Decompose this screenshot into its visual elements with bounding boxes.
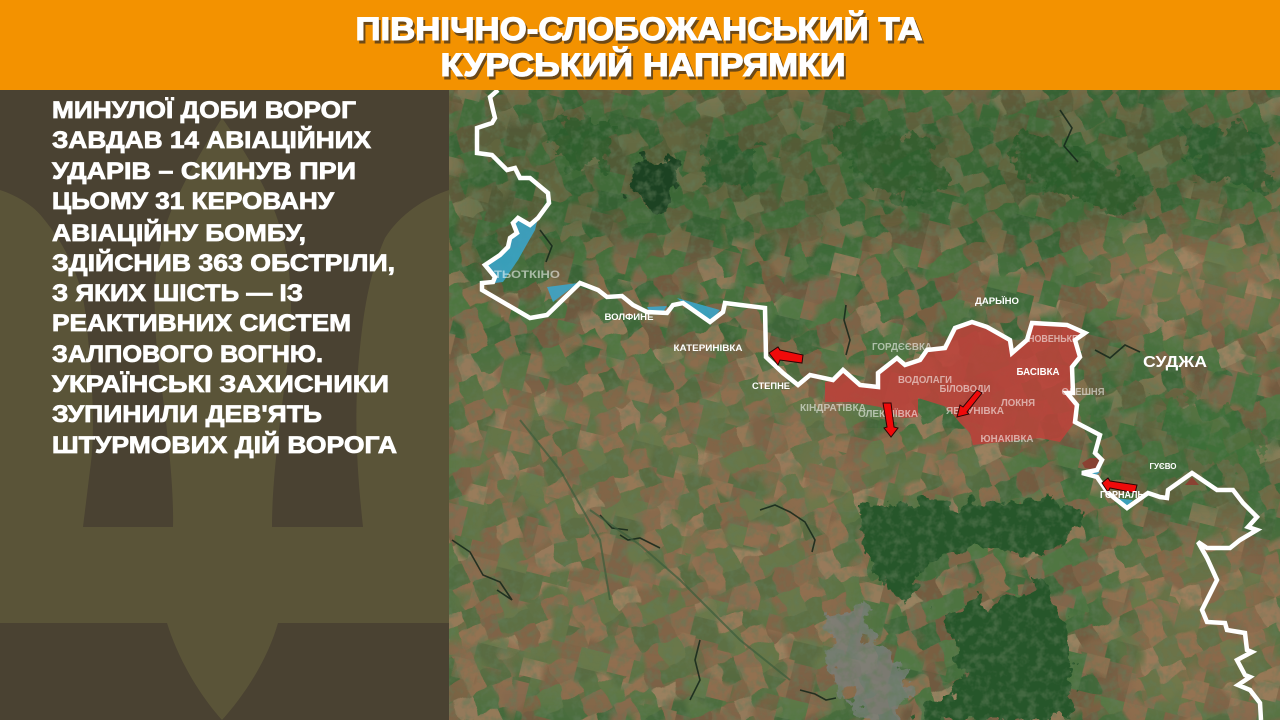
panel text: ЦЬОМУ 31 КЕРОВАНУ (52, 188, 335, 215)
panel text: З ЯКИХ ШІСТЬ — ІЗ (52, 280, 303, 307)
panel text: ШТУРМОВИХ ДІЙ ВОРОГА (52, 431, 397, 459)
dim settlement labels: КІНДРАТІВКА (800, 403, 866, 414)
bright settlement labels: КАТЕРИНІВКА (674, 343, 743, 354)
farmland fields (430, 70, 1280, 720)
bright settlement labels: БАСІВКА (1016, 366, 1060, 378)
trident emblem (0, 118, 449, 720)
panel text: ЗАВДАВ 14 АВІАЦІЙНИХ (52, 126, 371, 154)
forests (552, 115, 1270, 720)
arrow: Hornal (1102, 478, 1137, 493)
dim settlement labels: БІЛОВОДИ (940, 384, 990, 395)
dim settlement labels: ЯБЛУНІВКА (946, 406, 1004, 417)
dim settlement labels: ТЬОТКІНО (494, 269, 561, 281)
title (356, 11, 922, 83)
dim settlement labels: ОЛЕШНЯ (1062, 387, 1104, 398)
arrow: Yablunivka (957, 390, 982, 417)
rivers and roads (452, 110, 1140, 700)
bright settlement labels (604, 296, 1207, 501)
header band (0, 0, 1280, 90)
arrow: Oleksiivka (883, 403, 898, 437)
panel text: РЕАКТИВНИХ СИСТЕМ (52, 310, 351, 337)
liberated areas: blue (485, 218, 1133, 506)
bright settlement labels: ДАРЬЇНО (975, 296, 1019, 307)
panel text: АВІАЦІЙНУ БОМБУ, (52, 219, 306, 247)
arrow: Stepne (769, 347, 803, 365)
map (430, 70, 1280, 720)
bright settlement labels: СТЕПНЕ (752, 381, 790, 392)
panel text: ЗДІЙСНИВ 363 ОБСТРІЛИ, (52, 249, 395, 277)
bright settlement labels: ВОЛФИНЕ (604, 312, 654, 323)
mottled texture (449, 90, 1280, 720)
attack arrows (769, 347, 1137, 493)
panel text: МИНУЛОЇ ДОБИ ВОРОГ (52, 97, 356, 124)
title: ПІВНІЧНО-СЛОБОЖАНСЬКИЙ ТА (356, 11, 922, 47)
dim settlement labels: ГОРДЄЄВКА (872, 342, 932, 353)
occupied area: red (825, 322, 1199, 485)
dim settlement labels: ВОДОЛАГИ (898, 375, 952, 386)
panel text: ЗУПИНИЛИ ДЕВ'ЯТЬ (52, 401, 322, 428)
dim settlement labels: ОЛЕКСІЇВКА (858, 407, 918, 420)
dim settlement labels (494, 269, 1104, 445)
dim settlement labels: ЮНАКІВКА (980, 434, 1034, 445)
dim settlement labels: НОВЕНЬКЕ (1028, 334, 1078, 345)
bright settlement labels: ГУЄВО (1150, 462, 1176, 471)
panel text (52, 97, 397, 459)
bright settlement labels: ГОРНАЛЬ (1100, 490, 1144, 501)
left panel (0, 90, 449, 720)
dim settlement labels: ЛОКНЯ (1001, 398, 1035, 409)
bright settlement labels: СУДЖА (1143, 354, 1207, 371)
panel text: УДАРІВ – СКИНУВ ПРИ (52, 158, 356, 185)
panel text: ЗАЛПОВОГО ВОГНЮ. (52, 341, 323, 368)
title: КУРСЬКИЙ НАПРЯМКИ (440, 47, 846, 83)
front line (477, 90, 1261, 720)
city (828, 606, 912, 720)
panel text: УКРАЇНСЬКІ ЗАХИСНИКИ (52, 371, 389, 398)
